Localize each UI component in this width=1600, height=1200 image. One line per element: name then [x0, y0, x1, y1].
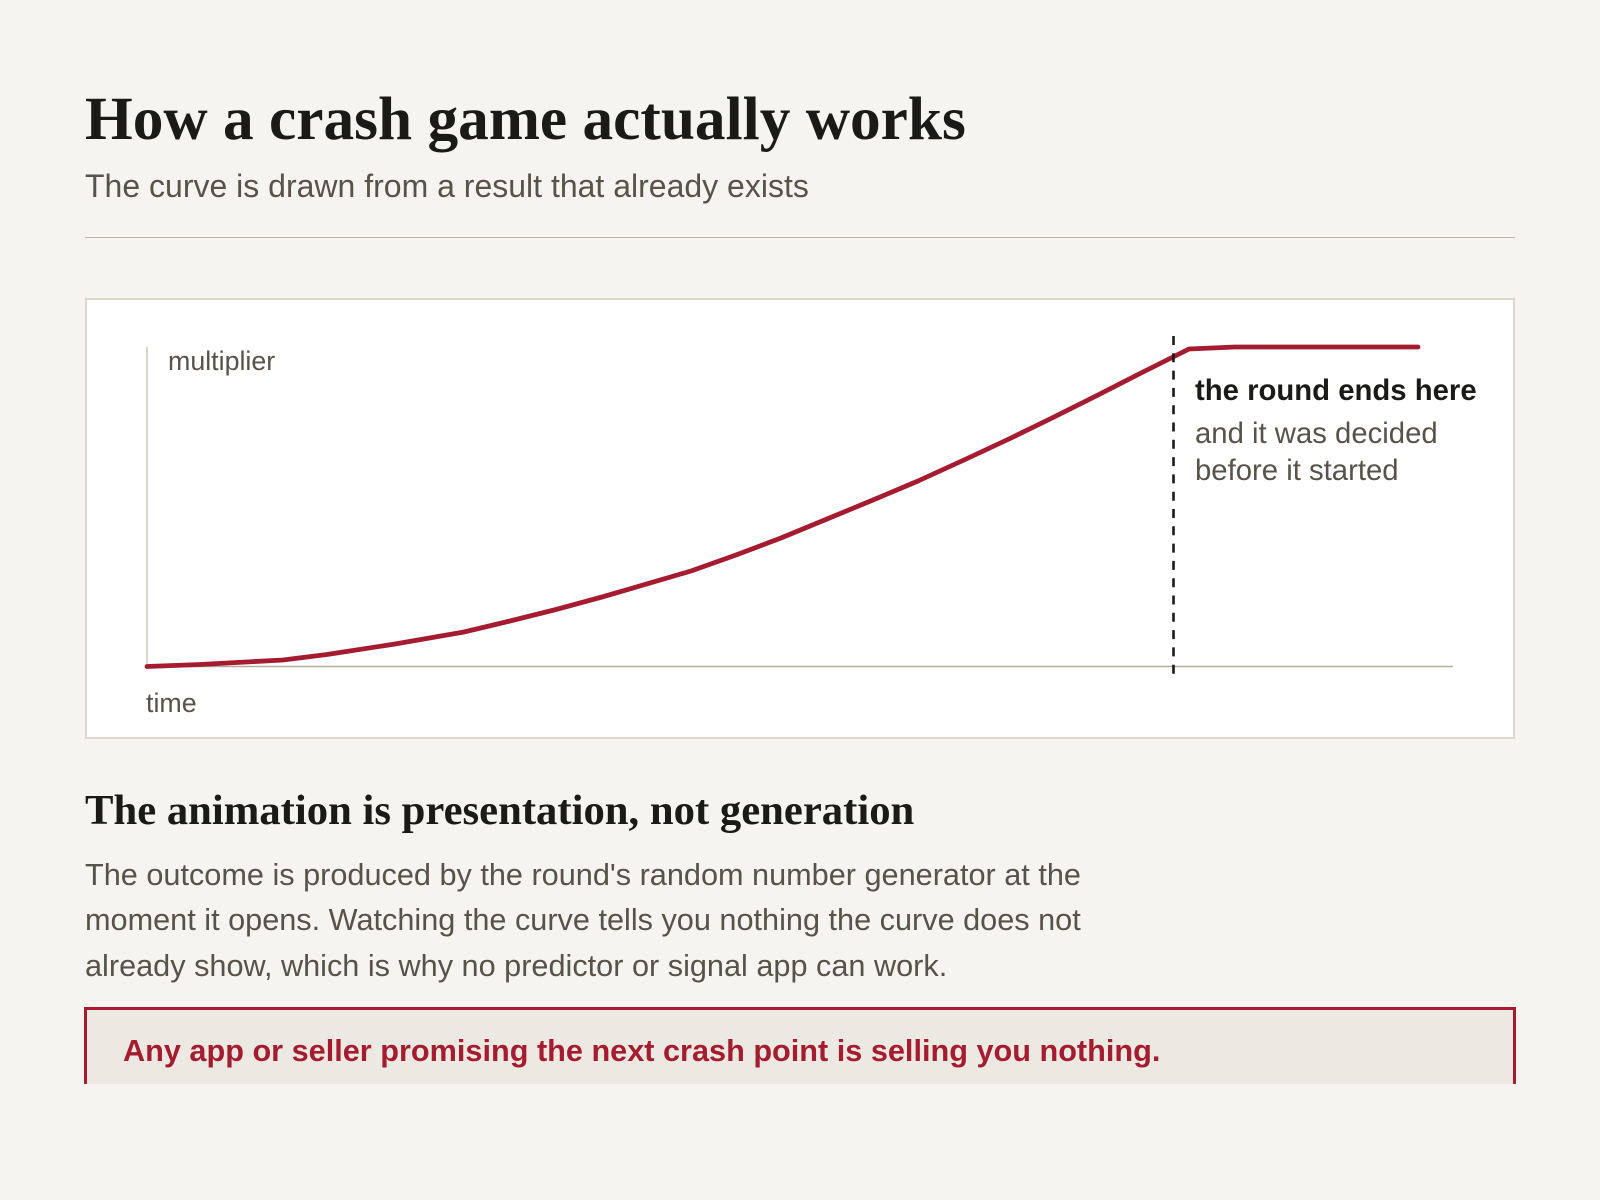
body text: The outcome is produced by the round's random number generator at the	[85, 858, 1081, 892]
y axis	[146, 347, 148, 666]
warning text: Any app or seller promising the next crash point is selling you nothing.	[123, 1034, 1160, 1068]
body text: already show, which is why no predictor or signal app can work.	[85, 949, 947, 983]
x axis label: time	[146, 688, 197, 718]
panel: chart	[85, 298, 1515, 739]
callout: the round ends here	[1195, 374, 1477, 407]
subtitle: The curve is drawn from a result that already exists	[85, 168, 809, 204]
title: How a crash game actually works	[85, 85, 966, 153]
callout	[1195, 374, 1477, 487]
callout: and it was decided	[1195, 417, 1438, 450]
warning banner	[84, 1007, 1516, 1084]
crash curve	[147, 347, 1418, 666]
body text: moment it opens. Watching the curve tells you nothing the curve does not	[85, 903, 1081, 937]
heading: The animation is presentation, not generation	[85, 787, 914, 834]
y axis label: multiplier	[168, 346, 275, 376]
x axis	[147, 666, 1453, 668]
crash point marker line	[1172, 336, 1175, 675]
body text	[85, 858, 1081, 983]
callout: before it started	[1195, 454, 1399, 487]
